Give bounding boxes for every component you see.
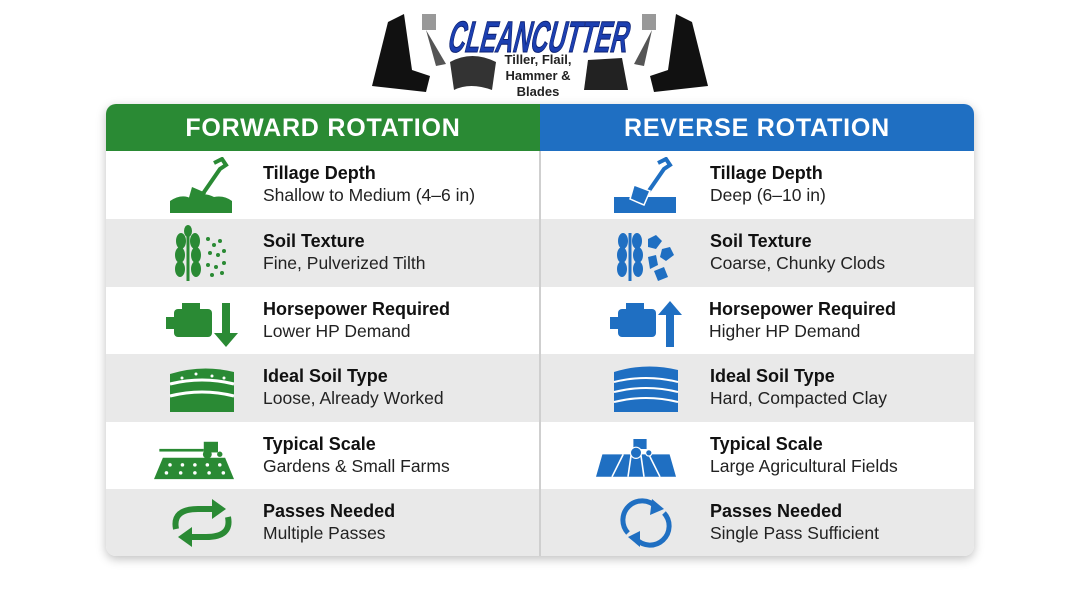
row: soil texture: Fine, Pulverized Tilth [263, 253, 425, 273]
row: ideal soil type: Hard, Compacted Clay [710, 388, 887, 408]
row: passes needed: Single Pass Sufficient [710, 523, 879, 543]
header: reverse rotation: REVERSE ROTATION [624, 114, 890, 142]
row: soil texture: Coarse, Chunky Clods [710, 253, 885, 273]
row: soil texture: Soil Texture [710, 231, 812, 251]
icon: engine with up arrow [610, 301, 682, 347]
icon: left blades [372, 14, 496, 92]
row: typical scale [154, 434, 898, 480]
icon: wheat and fine dots [175, 225, 226, 281]
row: horsepower: Horsepower Required [263, 299, 450, 319]
row: ideal soil type: Ideal Soil Type [263, 366, 388, 386]
row: tillage depth: Tillage Depth [263, 163, 376, 183]
logo [372, 14, 708, 99]
tagline: Hammer & [505, 68, 571, 83]
row: passes needed: Passes Needed [710, 501, 842, 521]
row: typical scale: Gardens & Small Farms [263, 456, 450, 476]
row: horsepower [166, 299, 896, 347]
row: typical scale: Typical Scale [263, 434, 376, 454]
row: soil texture: Soil Texture [263, 231, 365, 251]
row: passes needed: Multiple Passes [263, 523, 386, 543]
row: tillage depth: Tillage Depth [710, 163, 823, 183]
comparison table [106, 104, 974, 556]
row: horsepower: Higher HP Demand [709, 321, 860, 341]
icon: small farm garden [154, 442, 234, 480]
row: soil texture [106, 219, 974, 287]
row: horsepower: Horsepower Required [709, 299, 896, 319]
row: tillage depth: Shallow to Medium (4–6 in) [263, 185, 475, 205]
icon: compacted clay layers [614, 366, 678, 412]
row: passes needed: Passes Needed [263, 501, 395, 521]
icon: multiple passes arrows [172, 499, 232, 547]
header: forward rotation [106, 104, 540, 151]
tagline: Blades [517, 84, 559, 99]
row: ideal soil type: Loose, Already Worked [263, 388, 444, 408]
row: typical scale: Large Agricultural Fields [710, 456, 898, 476]
icon: shovel green [170, 157, 232, 213]
row: horsepower: Lower HP Demand [263, 321, 411, 341]
icon: loose soil layers [170, 368, 234, 412]
row: ideal soil type: Ideal Soil Type [710, 366, 835, 386]
row: ideal soil type [106, 354, 974, 422]
icon: large field tractor [596, 439, 676, 477]
icon: right blades [584, 14, 708, 92]
header: reverse rotation [540, 104, 974, 151]
row: typical scale: Typical Scale [710, 434, 823, 454]
row: tillage depth [170, 157, 826, 213]
icon: wheat and clods [617, 233, 674, 281]
row: passes needed [106, 489, 974, 557]
tagline [505, 52, 571, 99]
header: forward rotation: FORWARD ROTATION [185, 114, 461, 142]
icon: shovel blue [614, 157, 676, 213]
icon: engine with down arrow [166, 303, 238, 347]
tagline: Tiller, Flail, [505, 52, 571, 67]
row: tillage depth: Deep (6–10 in) [710, 185, 826, 205]
icon: single pass arrow [620, 498, 672, 548]
